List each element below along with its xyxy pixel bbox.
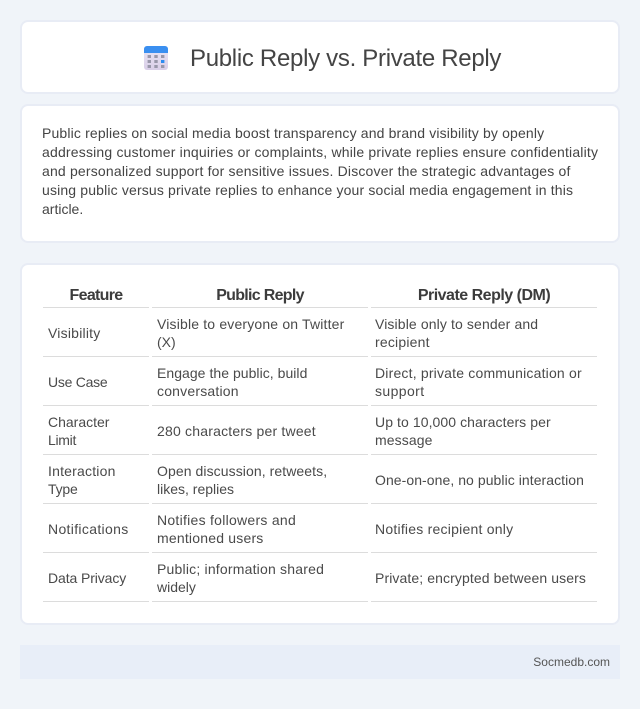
row: use case: support [375,383,424,399]
row: character limit [48,414,551,448]
row: character limit: Up to 10,000 characters per [375,414,551,430]
table header: public reply: Public Reply [216,287,304,304]
row: character limit: Limit [48,432,76,448]
row: visibility: Visible to everyone on Twitter [157,316,344,332]
panel: comparison table card [20,263,620,625]
footer bar [20,645,620,679]
text block: intro: article. [42,201,83,217]
text block: intro: using public versus private replies to enhance your social media engagement in this [42,182,573,198]
row: use case: Engage the public, build [157,365,307,381]
title: Public Reply vs. Private Reply [190,45,501,72]
row: notifications: Notifications [48,521,129,537]
panel: intro card [20,104,620,243]
row: character limit: Character [48,414,109,430]
footer text: Socmedb.com [533,655,610,669]
row: notifications [48,512,514,546]
row: use case: Direct, private communication or [375,365,582,381]
icon: calendar [144,46,168,70]
row: interaction type [48,463,584,497]
row: notifications: Notifies followers and [157,512,296,528]
row: data privacy: Private; encrypted between users [375,570,586,586]
row: interaction type: One-on-one, no public interaction [375,472,584,488]
row: character limit: message [375,432,433,448]
row: use case: Use Case [48,374,107,390]
row: use case: conversation [157,383,239,399]
row: notifications: Notifies recipient only [375,521,513,537]
row: character limit: 280 characters per tweet [157,423,316,439]
text block: intro: Public replies on social media boost transparency and brand visibility by openly [42,125,544,141]
row: interaction type: Open discussion, retweets, [157,463,327,479]
row: data privacy [48,561,586,595]
row: visibility: recipient [375,334,430,350]
text block: intro: addressing customer inquiries or complaints, while private replies ensure confidentiality [42,144,598,160]
row: data privacy: widely [157,579,196,595]
panel: title card [20,20,620,94]
row: visibility: Visibility [48,325,101,341]
row: visibility [48,316,538,350]
row: use case [48,365,582,399]
row: interaction type: likes, replies [157,481,234,497]
row: data privacy: Data Privacy [48,570,126,586]
text block: intro: and personalized support for sensitive issues. Discover the strategic advantages of [42,163,571,179]
row: visibility: (X) [157,334,176,350]
row: visibility: Visible only to sender and [375,316,538,332]
table header: feature: Feature [70,287,122,304]
row: interaction type: Type [48,481,78,497]
row: interaction type: Interaction [48,463,116,479]
row: notifications: mentioned users [157,530,264,546]
table header: private reply: Private Reply (DM) [418,287,550,304]
text block: intro [42,125,598,217]
row: data privacy: Public; information shared [157,561,324,577]
